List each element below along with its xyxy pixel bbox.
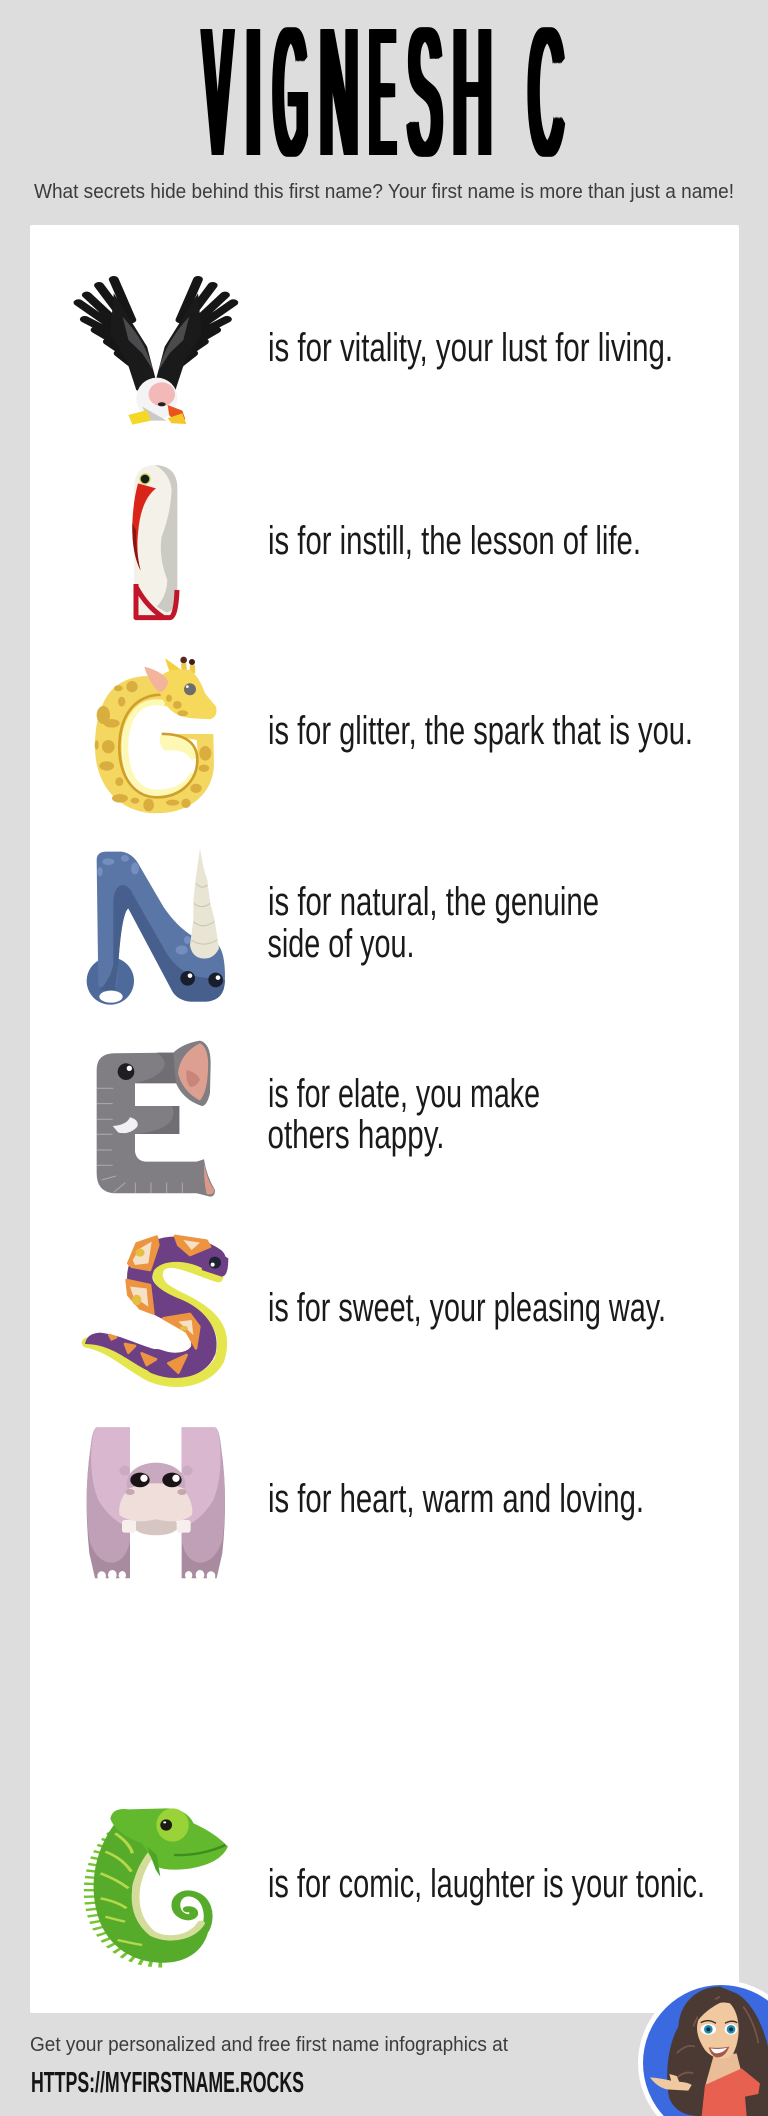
icon: snake letter S [85,1236,228,1382]
text: N lines: is for natural, the genuine [268,880,599,924]
text: N lines [268,880,599,966]
title [200,0,566,194]
avatar: woman illustration [650,1987,768,2116]
text: E lines: others happy. [268,1113,444,1157]
icon: narwhal letter N [87,848,225,1005]
icon: giraffe letter G [95,657,216,813]
icon: vulture letter V [78,279,233,425]
footer invitation text: Get your personalized and free first name infographics at [30,2034,508,2056]
avatar badge [638,1980,768,2116]
text: H line: is for heart, warm and loving. [268,1477,644,1521]
icon: chameleon letter C [92,1808,228,1963]
text: I line: is for instill, the lesson of life. [268,519,641,563]
text: E lines [268,1072,540,1157]
text: E lines: is for elate, you make [268,1072,540,1116]
icon: elephant letter E [97,1041,215,1197]
subtitle: What secrets hide behind this first name? Your first name is more than just a name! [34,181,734,203]
icon: stork letter I [132,465,177,618]
text: N lines: side of you. [268,922,414,966]
footer link: HTTPS://MYFIRSTNAME.ROCKS [31,2067,304,2099]
icon: hippo letter H [87,1427,225,1581]
white content panel [30,225,738,2013]
